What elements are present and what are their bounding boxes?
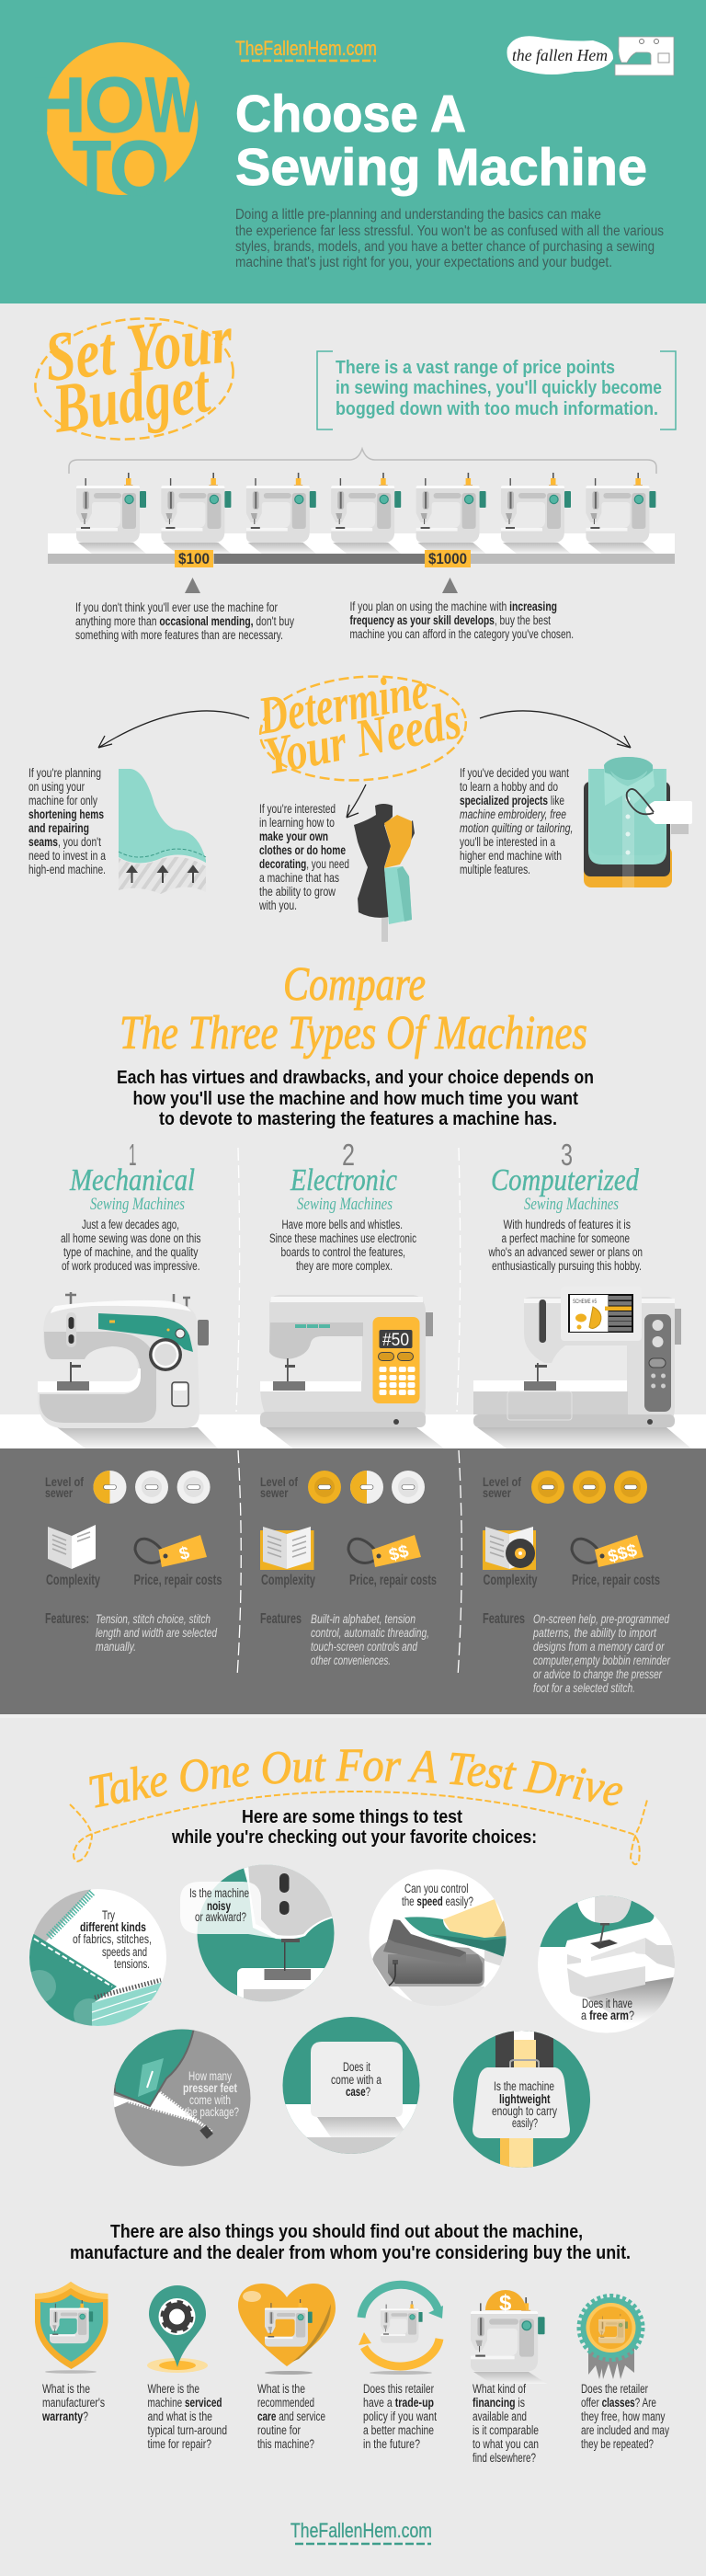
circle: fabrics: tensions. (114, 1957, 150, 1971)
text: specialized projects: you'll be interested in a (460, 835, 555, 849)
name (491, 1163, 640, 1214)
dark panel (0, 1448, 706, 1714)
labels: Price, repair costs (349, 1573, 437, 1588)
level of sewer (260, 1471, 425, 1504)
features: control, automatic threading, (311, 1626, 429, 1640)
features: or advice to change the presser (533, 1667, 662, 1681)
intro text: machine that's just right for you, your expectations and your budget. (235, 255, 612, 270)
intro text: how you'll use the machine and how much time you want (132, 1089, 578, 1109)
labels: Price, repair costs (572, 1573, 660, 1588)
illustration: dress form (354, 804, 415, 942)
item: warranty: warranty? (41, 2410, 88, 2423)
column: electronic (260, 1138, 444, 1667)
text: specialized projects (460, 766, 574, 876)
features: Features (260, 1611, 302, 1627)
badge: how to: H (30, 62, 86, 148)
price tag (572, 1535, 643, 1567)
text: specialized projects: multiple features. (460, 863, 530, 876)
item: care: What is the (257, 2382, 305, 2396)
complexity icon (483, 1527, 536, 1570)
section: determine your needs (28, 660, 692, 942)
section: set your budget (29, 300, 676, 642)
circle: speed: the speed easily? (402, 1895, 473, 1908)
circle: speed (370, 1869, 507, 2009)
text: occasional mending (75, 601, 294, 642)
item: trade-up: Does this retailer (363, 2382, 434, 2396)
circle: free arm: Does it have (582, 1997, 632, 2010)
circle: lightweight: Is the machine (494, 2079, 554, 2093)
circle: free arm (538, 1896, 675, 2032)
name: Computerized (491, 1163, 640, 1197)
heading: determine your needs: Your Needs (259, 690, 466, 786)
item: classes: Does the retailer (581, 2382, 648, 2396)
description: boards to control the features, (281, 1245, 405, 1259)
circle: noisy: or awkward? (195, 1910, 246, 1924)
item: financing: find elsewhere? (473, 2451, 536, 2465)
title: Choose A (235, 85, 466, 143)
circle: presser feet: come with (189, 2093, 231, 2107)
circle: lightweight (453, 2028, 590, 2170)
item: financing: to what you can (473, 2437, 539, 2451)
description: who's an advanced sewer or plans on (488, 1245, 643, 1259)
description: a perfect machine for someone (502, 1231, 630, 1245)
circle: noisy (180, 1865, 335, 2001)
circle: fabrics: Try (102, 1908, 115, 1922)
row of machines (76, 473, 655, 554)
text: hems: need to invest in a (28, 849, 106, 863)
text: specialized projects: motion quilting or tailoring, (460, 821, 574, 835)
description: type of machine, and the quality (63, 1245, 199, 1259)
labels (484, 1573, 660, 1588)
features: touch-screen controls and (311, 1640, 417, 1654)
text: increasing frequency (349, 600, 574, 641)
item: care: this machine? (257, 2437, 314, 2451)
level of sewer: sewer (260, 1485, 289, 1500)
description: Just a few decades ago, (82, 1218, 179, 1231)
item: serviced: and what is the (147, 2410, 212, 2423)
item: trade-up: policy if you want (363, 2410, 437, 2423)
badge: how to (30, 42, 200, 212)
item: financing: What kind of (473, 2382, 526, 2396)
badge: how to: O (109, 125, 169, 212)
brace (69, 449, 656, 474)
name: Sewing Machines (297, 1195, 393, 1214)
text: own clothes: a machine that has (259, 871, 339, 885)
text: occasional mending: anything more than occasional mending, don't buy (75, 614, 294, 628)
heading: compare the three types: The Three Types Of Machines (120, 1007, 587, 1059)
intro text (117, 1068, 594, 1129)
circle: fabrics: different kinds (80, 1920, 146, 1934)
text: own clothes: with you. (258, 899, 297, 912)
circle: case: Does it (343, 2060, 370, 2074)
features (260, 1611, 429, 1667)
title: Sewing Machine (235, 138, 647, 197)
name: Mechanical (69, 1163, 195, 1197)
text: hems: If you're planning (28, 766, 101, 780)
section: compare (0, 958, 706, 1718)
section: things to find out (35, 2222, 669, 2465)
column: computerized (473, 1138, 691, 1695)
item: warranty: What is the (42, 2382, 90, 2396)
description: Since these machines use electronic (269, 1231, 416, 1245)
heading: compare the three types (120, 958, 587, 1059)
item: serviced: typical turn-around (147, 2423, 227, 2437)
price tag: $$$ (606, 1540, 640, 1567)
text: own clothes: the ability to grow (259, 885, 336, 899)
circle: fabrics (29, 1889, 166, 2026)
circle: free arm: a free arm? (581, 2009, 634, 2022)
text: own clothes: make your own (259, 830, 328, 843)
circle: lightweight: lightweight (499, 2092, 551, 2106)
item: care: recommended (257, 2396, 314, 2410)
white table band (0, 1414, 706, 1448)
features: Built-in alphabet, tension (311, 1612, 416, 1626)
item: financing: is it comparable (473, 2423, 539, 2437)
description (61, 1218, 201, 1273)
heading: set your budget: Budget (48, 349, 216, 448)
callout: price points: in sewing machines, you'll quickly become (336, 378, 662, 398)
features: Tension, stitch choice, stitch (96, 1612, 211, 1626)
text: hems (28, 766, 106, 876)
text: increasing frequency: If you plan on using the machine with increasing (349, 600, 557, 613)
level of sewer: Level of (260, 1474, 298, 1489)
level of sewer: Level of (45, 1474, 84, 1489)
circle: speed: Can you control (404, 1882, 469, 1895)
marker: high price (442, 578, 458, 593)
text: own clothes: If you're interested (259, 802, 336, 816)
item: financing: financing is (473, 2396, 525, 2410)
heading: set your budget: Set Your (41, 300, 237, 396)
text: occasional mending: If you don't think you'll ever use the machine for (75, 601, 278, 614)
item: serviced: machine serviced (147, 2396, 222, 2410)
labels: Complexity (46, 1573, 100, 1588)
heading: set your budget (29, 300, 239, 449)
machine illustration: #50 (382, 1331, 409, 1350)
panel: header (0, 0, 706, 303)
item: serviced: time for repair? (147, 2437, 211, 2451)
heading: compare the three types: Compare (283, 958, 426, 1011)
text: specialized projects: to learn a hobby and do (460, 780, 558, 794)
item: warranty (35, 2282, 108, 2423)
level of sewer: Level of (483, 1474, 521, 1489)
text: specialized projects: higher end machine with (460, 849, 562, 863)
level of sewer: sewer (45, 1485, 73, 1500)
machine illustration (260, 1295, 444, 1448)
label: $100: $100 (178, 550, 210, 567)
heading: determine your needs (254, 660, 470, 787)
label: $1000: $1000 (428, 550, 467, 567)
logo (507, 36, 674, 75)
machine illustration: SCHEME #5 (573, 1299, 598, 1305)
intro text: Here are some things to test (242, 1807, 462, 1827)
intro text: to devote to mastering the features a machine has. (159, 1109, 557, 1129)
arrow: right (480, 711, 631, 748)
text: hems: machine for only (28, 794, 97, 807)
text: increasing frequency: machine you can afford in the category you've chosen. (349, 627, 574, 641)
heading: take one out for a test drive: Take One Out For A Test Drive (89, 1749, 623, 1808)
features: manually. (96, 1640, 136, 1654)
item: classes: they free, how many (581, 2410, 666, 2423)
title (235, 85, 647, 197)
heading: manufacture and the dealer from whom you're considering buy the unit. (70, 2243, 631, 2263)
labels: Price, repair costs (134, 1573, 222, 1588)
illustration: hem (119, 769, 206, 894)
price tag: $ (177, 1543, 192, 1564)
text: hems: and repairing (28, 821, 89, 835)
heading: take one out for a test drive (69, 1749, 648, 1865)
item: trade-up (359, 2284, 443, 2451)
badge: how to: O (85, 62, 144, 148)
text: hems: seams, you don't (28, 835, 101, 849)
item: financing: $ (499, 2291, 512, 2316)
price tag (348, 1535, 421, 1567)
item: classes (579, 2296, 669, 2451)
section: test drive (29, 1749, 675, 2168)
item: serviced (147, 2285, 227, 2451)
circle: lightweight: easily? (512, 2116, 538, 2130)
column: mechanical: 1 (129, 1138, 136, 1172)
name: Sewing Machines (524, 1195, 619, 1214)
text: own clothes: decorating, you need (259, 857, 349, 871)
intro text: while you're checking out your favorite choices: (171, 1827, 537, 1848)
circle: case (283, 2017, 419, 2154)
features: length and width are selected (96, 1626, 217, 1640)
complexity icon (260, 1527, 314, 1570)
features: patterns, the ability to import (532, 1626, 657, 1640)
text: specialized projects: specialized projects like (460, 794, 564, 807)
intro text: Each has virtues and drawbacks, and your choice depends on (117, 1068, 594, 1088)
item: trade-up: in the future? (363, 2437, 420, 2451)
item: classes: offer classes? Are (581, 2396, 656, 2410)
divider 2 (457, 1148, 461, 1677)
features: foot for a selected stitch. (533, 1681, 635, 1695)
circle: lightweight: enough to carry (492, 2104, 557, 2118)
description: Have more bells and whistles. (281, 1218, 403, 1231)
marker: low price (185, 578, 200, 593)
description: of work produced was impressive. (62, 1259, 200, 1273)
labels: Complexity (261, 1573, 315, 1588)
logo: the fallen Hem (512, 46, 608, 64)
badge: how to: W (145, 62, 200, 148)
complexity icon (48, 1525, 96, 1569)
heading: determine your needs: Determine (254, 660, 433, 746)
number: 2 (342, 1138, 355, 1172)
divider 1 (236, 1148, 241, 1677)
features: Features: (45, 1611, 89, 1627)
badge: how to: T (73, 125, 111, 212)
item: classes: are included and may (581, 2423, 669, 2437)
item: serviced: Where is the (147, 2382, 199, 2396)
item: care (238, 2284, 336, 2451)
site link: TheFallenHem.com (235, 37, 377, 60)
labels (261, 1573, 437, 1588)
illustration: shirts with tag (584, 757, 692, 887)
intro text (235, 207, 664, 270)
labels: Complexity (484, 1573, 538, 1588)
text: hems: high-end machine. (28, 863, 106, 876)
description: all home sewing was done on this (61, 1231, 201, 1245)
item: warranty: manufacturer's (42, 2396, 105, 2410)
name (69, 1163, 195, 1214)
intro text (171, 1807, 537, 1848)
text: own clothes: in learning how to (259, 816, 335, 830)
features (483, 1611, 670, 1695)
circle: presser feet: presser feet (183, 2081, 237, 2095)
circle: case: come with a (331, 2073, 381, 2087)
description: enthusiastically pursuing this hobby. (492, 1259, 642, 1273)
item: care: routine for (257, 2423, 301, 2437)
number: 3 (561, 1138, 573, 1172)
text: increasing frequency: frequency as your skill develops, buy the best (349, 613, 551, 627)
shelf with price bar (48, 533, 675, 564)
callout: price points: bogged down with too much information. (336, 399, 658, 419)
callout: price points (317, 351, 676, 429)
item: financing: available and (473, 2410, 527, 2423)
circle: noisy: noisy (207, 1899, 231, 1913)
name: Sewing Machines (90, 1195, 185, 1214)
features (45, 1611, 217, 1654)
text: hems: shortening hems (28, 807, 104, 821)
level of sewer (483, 1471, 647, 1504)
column: mechanical (38, 1138, 222, 1654)
item: financing (471, 2290, 547, 2465)
description (269, 1218, 416, 1273)
intro text: Doing a little pre-planning and understanding the basics can make (235, 207, 601, 223)
arrow: middle (347, 784, 366, 818)
circle: noisy: Is the machine (189, 1886, 249, 1900)
text: own clothes (258, 802, 349, 912)
circle: presser feet: How many (188, 2069, 232, 2083)
arrow: left (98, 711, 249, 748)
text: occasional mending: something with more features than are necessary. (75, 628, 283, 642)
text: hems: on using your (28, 780, 85, 794)
heading (70, 2222, 631, 2263)
machine illustration (38, 1292, 218, 1448)
item: classes: they be repeated? (581, 2437, 654, 2451)
name: Electronic (290, 1163, 397, 1197)
description: they are more complex. (296, 1259, 393, 1273)
features: other conveniences. (311, 1654, 391, 1667)
text: specialized projects: If you've decided you want (460, 766, 569, 780)
labels (46, 1573, 222, 1588)
text: specialized projects: machine embroidery, free (460, 807, 566, 821)
price tag: $$ (387, 1541, 411, 1565)
circle: presser feet (110, 2023, 250, 2167)
item: trade-up: a better machine (363, 2423, 434, 2437)
machine illustration (473, 1287, 691, 1448)
circle: fabrics: speeds and (102, 1945, 147, 1959)
callout: price points: There is a vast range of price points (336, 358, 615, 378)
text: own clothes: clothes or do home (259, 843, 346, 857)
features: designs from a memory card or (533, 1640, 665, 1654)
level of sewer (45, 1471, 211, 1504)
item: trade-up: have a trade-up (363, 2396, 434, 2410)
description: With hundreds of features it is (504, 1218, 631, 1231)
level of sewer: sewer (483, 1485, 511, 1500)
description (488, 1218, 643, 1273)
circle: case: case? (346, 2085, 370, 2099)
features: Features (483, 1611, 525, 1627)
circle: presser feet: the package? (185, 2105, 239, 2119)
price tag (135, 1535, 207, 1567)
heading: There are also things you should find out about the machine, (110, 2222, 583, 2242)
footer link: TheFallenHem.com (290, 2519, 432, 2542)
name (290, 1163, 397, 1214)
item: care: care and service (257, 2410, 325, 2423)
circle: fabrics: of fabrics, stitches, (73, 1932, 152, 1946)
